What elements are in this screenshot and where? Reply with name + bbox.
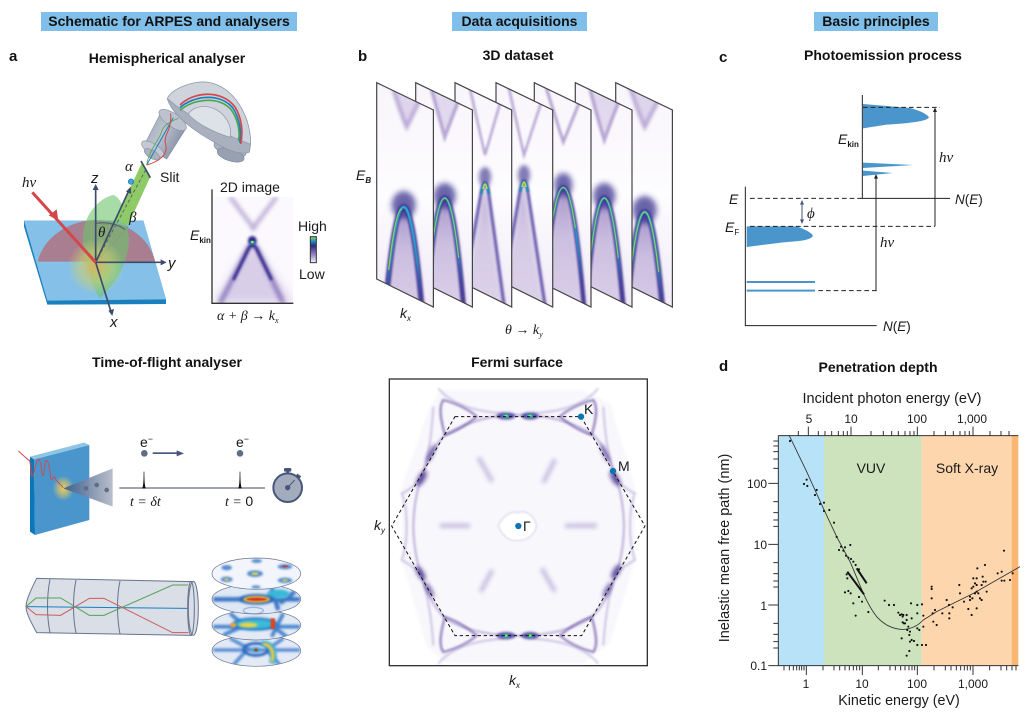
panel a: time-of-flight	[18, 443, 302, 666]
2D image	[213, 197, 293, 303]
electron path dashed	[96, 170, 146, 262]
emission glow	[67, 238, 124, 295]
van Hove hot spots	[497, 412, 539, 639]
heading: penetration depth: Penetration depth	[818, 359, 938, 375]
sample plate	[24, 221, 166, 305]
time-of-flight labels: e	[236, 434, 244, 450]
electron dot	[128, 179, 134, 184]
panel letter d: d	[719, 358, 728, 375]
photon energy arrow short	[874, 174, 878, 291]
slice 4	[496, 80, 553, 322]
panel a: ARPES geometry	[24, 161, 316, 316]
slice axis labels: k	[400, 305, 407, 321]
upper core peaks	[863, 163, 913, 176]
chart labels: 100	[907, 677, 927, 691]
time-of-flight labels: t = δt	[130, 495, 162, 510]
chart labels: 5	[806, 412, 813, 426]
Fermi surface labels: M	[618, 458, 630, 474]
six inner segments	[440, 457, 597, 592]
momentum stack disc 1	[212, 558, 301, 589]
dense data streaks	[847, 568, 867, 594]
Fermi surface labels: x	[515, 681, 521, 690]
slice axis labels: θ → k	[505, 323, 539, 338]
geometry labels: High	[298, 218, 327, 234]
slice axis labels	[356, 167, 543, 339]
analyser feet	[212, 138, 248, 165]
panel b: Fermi surface map	[389, 379, 647, 666]
slice 6	[575, 80, 632, 310]
energy diagram labels: E	[725, 219, 734, 235]
chart labels: Incident photon energy (eV)	[803, 391, 981, 407]
Fermi surface labels: K	[584, 401, 594, 417]
energy diagram labels: F	[734, 228, 739, 237]
chart labels: 1	[760, 599, 767, 613]
geometry labels: E	[190, 227, 199, 243]
time-of-flight labels: −	[148, 434, 153, 444]
time-of-flight labels: e	[140, 434, 148, 450]
geometry labels: y	[167, 255, 177, 272]
slice axis labels: B	[365, 176, 371, 185]
work function arrow	[800, 200, 804, 224]
y axis ticks	[768, 441, 778, 666]
dashed energy levels	[750, 107, 940, 291]
core levels	[747, 282, 815, 291]
heading: time-of-flight analyser: Time-of-flight analyser	[92, 354, 242, 370]
axis x	[96, 262, 114, 316]
polar angle arc	[96, 223, 125, 229]
geometry labels: Low	[299, 266, 326, 282]
chart labels: 1,000	[958, 677, 988, 691]
central ring	[498, 512, 537, 541]
measured data points	[790, 441, 1013, 656]
Fermi surface labels: Γ	[523, 518, 531, 534]
electrons on timeline	[141, 450, 243, 457]
geometry labels: α + β → k	[217, 309, 275, 324]
heading: Fermi surface: Fermi surface	[471, 354, 563, 370]
time-of-flight labels: −	[244, 434, 249, 444]
Fermi surface labels: k	[509, 672, 516, 688]
panel b: slice stack of band maps	[377, 80, 673, 322]
chart labels: 1	[803, 677, 810, 691]
stopwatch	[273, 468, 302, 502]
electron trajectories in tube	[26, 585, 188, 633]
hemispherical analyser	[139, 82, 251, 165]
electron cone	[63, 468, 113, 507]
bottom axis ticks	[784, 666, 1016, 675]
chart labels: 10	[855, 677, 869, 691]
energy diagram labels: kin	[847, 140, 859, 149]
chart labels: 0.1	[750, 659, 767, 673]
momentum stack disc 3	[212, 610, 301, 640]
dome	[167, 82, 251, 153]
heading: hemispherical analyser: Hemispherical analyser	[89, 50, 246, 66]
geometry labels: θ	[98, 225, 106, 241]
universal curve	[789, 436, 1020, 629]
slit bar	[141, 161, 150, 178]
drift arrow	[153, 450, 184, 456]
energy diagram labels	[725, 131, 983, 334]
section header: schematic: Schematic for ARPES and analysers	[48, 13, 290, 29]
geometry labels: α	[125, 159, 134, 175]
axes	[745, 95, 950, 326]
chart labels	[717, 391, 998, 709]
slice 5	[534, 80, 591, 310]
emission vector arrow	[96, 187, 131, 262]
electron dots in cone	[84, 483, 109, 492]
axis y	[96, 259, 167, 265]
time axis	[119, 472, 265, 488]
slice 2	[416, 80, 473, 310]
2D image axes	[212, 189, 293, 303]
axis z	[93, 184, 99, 262]
slice 1	[377, 80, 434, 317]
geometry labels: x	[274, 316, 279, 325]
chart labels: Kinetic energy (eV)	[838, 693, 960, 709]
slice 7	[616, 80, 673, 322]
energy diagram labels: hν	[880, 235, 894, 251]
panel c: energy diagram	[745, 95, 950, 326]
geometry labels	[22, 159, 327, 331]
slice 3	[455, 80, 512, 322]
geometry labels: kin	[199, 236, 211, 245]
geometry labels: Slit	[160, 169, 180, 185]
energy diagram labels: E	[838, 131, 847, 147]
analyser lens column	[139, 105, 190, 162]
energy diagram labels: hν	[939, 150, 954, 166]
section header: basic principles: Basic principles	[822, 13, 930, 29]
time-of-flight labels	[130, 434, 253, 510]
geometry labels: β	[128, 210, 137, 226]
chart labels: 100	[747, 477, 767, 491]
panel d: penetration depth chart	[768, 427, 1020, 675]
frame	[389, 379, 647, 666]
momentum stack disc 2	[212, 584, 301, 614]
spectral regions	[778, 436, 1018, 666]
chart labels: Soft X-ray	[936, 460, 998, 476]
momentum stack disc 4	[212, 635, 301, 666]
slice axis labels: y	[538, 330, 543, 339]
energy diagram labels: N(E)	[955, 192, 983, 207]
upper valence band	[863, 104, 929, 128]
heading: 3D dataset: 3D dataset	[483, 47, 554, 63]
Fermi surface labels: y	[380, 526, 386, 535]
chart labels: Inelastic mean free path (nm)	[717, 454, 733, 642]
geometry labels: 2D image	[220, 179, 280, 195]
panel letter b: b	[358, 48, 367, 65]
Fermi surface labels	[374, 401, 630, 690]
excitation glow	[53, 476, 74, 501]
colour bar	[310, 237, 316, 263]
geometry labels: hν	[22, 175, 36, 191]
section header: data acquisitions: Data acquisitions	[462, 13, 578, 29]
panel letter c: c	[719, 49, 727, 66]
laser pulse wave	[18, 451, 63, 488]
energy diagram labels: E	[729, 191, 739, 207]
green emission lobe	[83, 195, 129, 298]
lower density of states valence band	[747, 226, 813, 247]
chart labels: 10	[844, 412, 858, 426]
photoemission hemisphere	[38, 220, 155, 262]
energy diagram labels: ϕ	[807, 206, 815, 222]
dark contour hot spots	[414, 443, 623, 599]
green analyser acceptance band	[115, 163, 150, 225]
energy diagram labels: N(E)	[883, 319, 911, 334]
Fermi surface labels: k	[374, 517, 381, 533]
electron trajectories	[147, 94, 242, 165]
geometry labels: x	[109, 314, 118, 331]
geometry labels: z	[90, 170, 99, 187]
panel letter a: a	[9, 48, 18, 65]
top axis ticks	[798, 427, 1009, 436]
time-of-flight labels: t = 0	[225, 493, 253, 510]
photon energy arrow long	[933, 107, 937, 226]
heading: photoemission process: Photoemission process	[804, 47, 962, 63]
faint intensity background	[402, 390, 635, 663]
outer arcs	[402, 388, 635, 664]
slice axis labels: x	[406, 314, 412, 323]
chart labels: 10	[754, 538, 767, 552]
symmetry points	[515, 413, 616, 529]
Brillouin zone hexagon	[392, 417, 645, 636]
chart labels: VUV	[857, 460, 886, 476]
plot frame and axes	[778, 436, 1018, 666]
incident photon arrow	[32, 192, 96, 262]
slice axis labels: E	[356, 167, 365, 183]
lens tube	[26, 578, 198, 635]
sample block	[30, 443, 89, 535]
chart labels: 100	[907, 412, 927, 426]
corner pockets	[441, 400, 596, 652]
inner Fermi contour	[413, 415, 624, 636]
chart labels: 1,000	[957, 412, 987, 426]
